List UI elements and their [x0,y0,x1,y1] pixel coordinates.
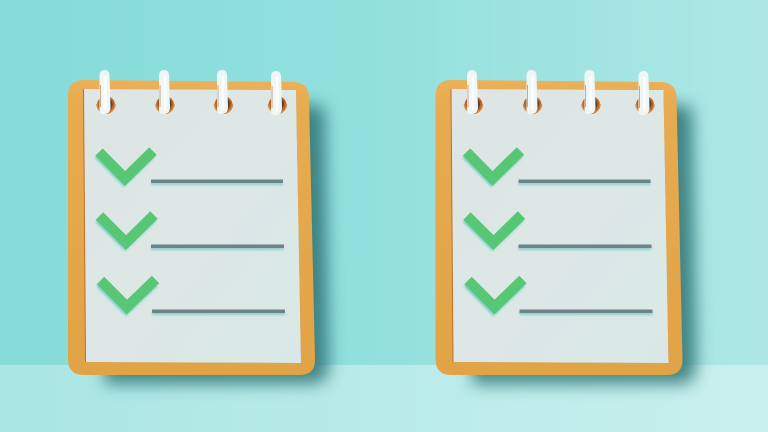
checklist row 1 [98,151,283,185]
background floor [0,365,768,432]
orange board [436,80,682,375]
board shadow [95,105,329,384]
checklist row 2 [466,215,652,250]
checklist row 1 [466,151,650,185]
spiral rings [100,70,282,115]
orange board [68,80,315,375]
board shadow [462,105,696,384]
binding holes [464,96,654,114]
binding holes [97,96,286,114]
checklist row 3 [467,280,652,315]
paper sheet [83,89,301,363]
notepad: left [68,70,329,384]
checklist row 2 [98,215,284,250]
checklist row 3 [100,280,285,315]
notepad: right [436,70,696,384]
spiral rings [467,70,650,115]
paper sheet [450,89,668,363]
